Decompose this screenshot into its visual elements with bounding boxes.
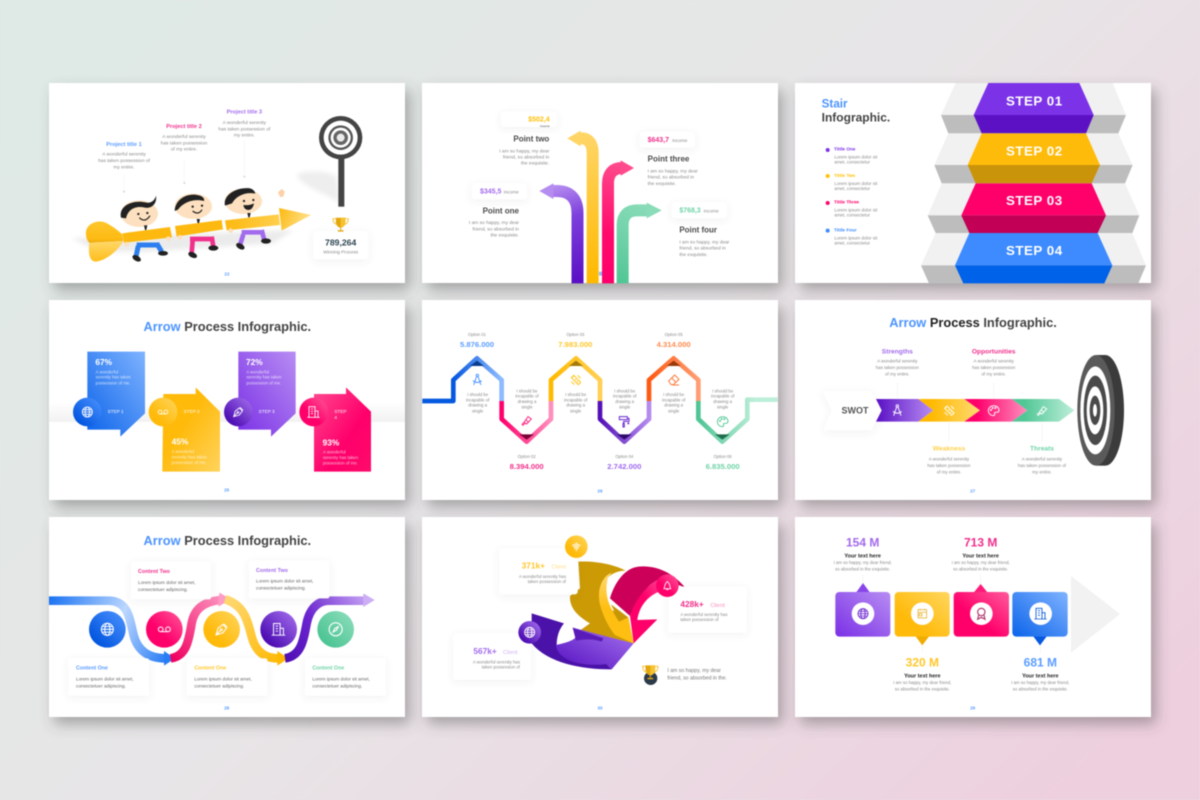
legend list: Tittle Two	[834, 173, 855, 178]
step 1: serenity has taken	[96, 375, 131, 380]
opportunities: Opportunities	[972, 348, 1016, 355]
step 1: A wonderful	[96, 369, 118, 374]
project title 1: A wonderful serenity	[102, 152, 146, 158]
step 3: STEP 3	[259, 409, 275, 414]
heading: Arrow Process Infographic.	[889, 315, 1057, 330]
winning stat card: 789,264	[325, 237, 356, 247]
project title 2	[161, 124, 208, 153]
step 2	[149, 387, 220, 472]
stat 713 M: so absorbed in the exquisite.	[953, 567, 1008, 572]
point four: the exquisite.	[679, 252, 708, 258]
step 2: 45%	[172, 437, 189, 447]
point three: $643,7	[648, 137, 669, 144]
step 03: STEP 03	[1006, 193, 1063, 208]
step 1: STEP 1	[108, 409, 124, 414]
arrow green	[623, 203, 662, 283]
option 04: I should be	[614, 388, 636, 393]
point two: income	[540, 124, 550, 128]
project title 1: has taken possession of	[98, 158, 151, 164]
legend list: Lorem ipsum dolor sit	[834, 235, 878, 240]
3D target	[1077, 355, 1124, 466]
card 567k: A wonderful serenity has	[473, 659, 520, 664]
pink curved arrow	[610, 566, 685, 643]
legend list: amet, consectetur	[834, 213, 870, 218]
panel: slide 24 branching arrows	[422, 83, 778, 283]
threats: A wonderful serenity	[1022, 457, 1063, 462]
step 3: 72%	[246, 357, 263, 367]
step 4: serenity has taken	[323, 455, 359, 460]
stat 320 M: so absorbed in the exquisite.	[895, 687, 950, 692]
content two purple: Lorem ipsum dolor sit amet,	[256, 579, 313, 584]
card 428k: A wonderful serenity has	[680, 612, 727, 617]
card 371k: A wonderful serenity has	[519, 574, 566, 579]
page number: 29	[970, 705, 976, 710]
point three: friend, so absorbed in	[648, 175, 694, 181]
option 01	[460, 332, 494, 413]
project title 2: A wonderful serenity	[162, 134, 206, 140]
legend list: Lorem ipsum dolor sit	[834, 181, 878, 186]
card 567k: Client	[503, 650, 518, 656]
trophy note: I am so happy, my dear	[667, 668, 721, 674]
block pink	[954, 584, 1009, 637]
option 04: 2.742.000	[607, 462, 641, 471]
page number	[599, 272, 602, 276]
stat 681 M: I am so happy, my dear friend,	[1011, 680, 1069, 685]
option 05: incapable of	[662, 397, 686, 402]
point three: income	[672, 138, 688, 143]
content one blue	[68, 658, 149, 696]
project title 3: has taken possession of	[218, 126, 271, 132]
option 04: single	[619, 404, 631, 409]
stat 681 M	[1011, 656, 1069, 692]
heading	[822, 98, 890, 125]
stat 681 M: 681 M	[1024, 656, 1057, 670]
option 05: 4.314.000	[657, 340, 691, 349]
panel: slide 27 SWOT arrow	[795, 300, 1151, 500]
page number: 27	[970, 488, 976, 493]
option 05: I should be	[663, 392, 685, 397]
point two: friend, so absorbed in	[503, 154, 550, 160]
point two: I am so happy, my dear	[499, 148, 550, 154]
point one: income	[504, 190, 519, 195]
option 01: I should be	[467, 392, 489, 397]
step 4: STEP	[334, 409, 347, 414]
stat 681 M: Your text here	[1022, 673, 1059, 679]
point one: the exquisite.	[491, 233, 519, 239]
step 2: possession of me.	[172, 460, 207, 465]
option 04	[607, 388, 641, 471]
weakness: of my entire.	[937, 469, 961, 474]
step 02: STEP 02	[1006, 143, 1063, 158]
weakness: Weakness	[933, 446, 966, 453]
page number: 30	[597, 705, 603, 710]
card 567k: taken possession of	[482, 664, 521, 669]
threats: my entire.	[1032, 469, 1052, 474]
legend list: amet, consectetur	[834, 186, 870, 191]
weakness	[927, 446, 971, 474]
page number: 28	[224, 705, 230, 710]
large grey arrow	[1071, 576, 1120, 653]
step 3: serenity has taken	[246, 375, 282, 380]
option 06	[706, 388, 740, 471]
option 03: I should be	[565, 392, 587, 397]
option 05	[657, 332, 691, 413]
stat 713 M: I am so happy, my dear friend,	[952, 560, 1010, 565]
threats	[1018, 446, 1067, 474]
legend list: Tittle Three	[834, 200, 859, 205]
character 1	[121, 196, 168, 263]
option 04: drawing a	[615, 399, 635, 404]
content two purple	[249, 561, 329, 598]
step 3: A wonderful	[246, 369, 269, 374]
arrow yellow	[567, 131, 593, 283]
step 2: serenity has taken	[172, 454, 207, 459]
step 02	[934, 133, 1133, 183]
content one blue: Lorem ipsum dolor sit amet,	[76, 677, 133, 682]
project title 1: my entire.	[113, 165, 135, 171]
step 2: A wonderful	[172, 449, 194, 454]
opportunities	[972, 348, 1016, 376]
card 428k: Client	[710, 603, 725, 609]
option 04: Option 04	[615, 454, 634, 459]
option 01: 5.876.000	[460, 340, 494, 349]
option 01: Option 01	[468, 332, 487, 337]
panel: slide 29 callout squares	[795, 517, 1151, 717]
option 01: incapable of	[466, 397, 490, 402]
card 428k: taken possession of	[680, 617, 719, 622]
option 03: single	[570, 408, 582, 413]
content two pink: Content Two	[138, 569, 171, 575]
chevron arrow	[876, 399, 1074, 422]
step 1: 67%	[95, 357, 113, 367]
content two purple: Content Two	[256, 568, 289, 574]
legend list: Tittle One	[834, 146, 856, 151]
option 03	[558, 332, 592, 413]
stat 713 M	[952, 536, 1010, 572]
option 05: single	[668, 408, 680, 413]
step 2: STEP 2	[184, 409, 200, 414]
dart arrow	[86, 208, 311, 262]
option 03: drawing a	[566, 403, 586, 408]
content one green: consectetuer adipiscing.	[312, 684, 362, 689]
option 02: 8.394.000	[510, 462, 544, 471]
circle globe	[89, 611, 126, 648]
page number: 26	[597, 489, 603, 494]
arrow purple	[539, 183, 577, 283]
strengths: has taken possession	[876, 365, 919, 370]
legend list: Lorem ipsum dolor sit	[834, 208, 878, 213]
step 01	[941, 83, 1126, 133]
option 06: incapable of	[711, 393, 735, 398]
character 2	[175, 194, 218, 259]
option 06: single	[717, 404, 729, 409]
project title 2: Project title 2	[166, 124, 202, 130]
option 03: incapable of	[564, 397, 588, 402]
panel: slide 26 zigzag options timeline	[422, 300, 778, 500]
wave arrows	[49, 593, 375, 666]
point four: friend, so absorbed in	[679, 246, 726, 252]
option 02: drawing a	[518, 399, 537, 404]
card 371k	[499, 535, 588, 594]
legend list: Lorem ipsum dolor sit	[834, 154, 878, 159]
zigzag line	[422, 358, 778, 442]
legend list	[826, 146, 878, 245]
card 567k	[453, 621, 541, 680]
stat 154 M: 154 M	[846, 536, 879, 550]
step 04	[921, 233, 1146, 283]
panel: stair infographic	[795, 83, 1151, 283]
point three	[640, 132, 698, 187]
content one yellow	[187, 658, 267, 696]
point two: $502,4	[528, 117, 550, 124]
card 428k	[656, 574, 747, 633]
content two pink: consectetuer adipiscing.	[138, 587, 188, 592]
arrow pink	[608, 160, 634, 283]
content one yellow: consectetuer adipiscing.	[194, 684, 244, 689]
strengths: Strengths	[882, 348, 913, 355]
legend list: Tittle Four	[834, 227, 857, 232]
panel: slide 30 three converging arrows	[422, 517, 778, 717]
peak markers	[470, 361, 730, 440]
option 04: incapable of	[613, 393, 637, 398]
option 06: Option 06	[714, 454, 732, 459]
step 4: 4	[334, 415, 337, 420]
block yellow	[895, 592, 950, 645]
content two pink	[131, 562, 211, 599]
content one green	[305, 658, 386, 696]
step 3: possession of me.	[246, 380, 281, 385]
strengths	[876, 348, 919, 376]
strengths: of my entire.	[885, 371, 910, 376]
option 01: single	[472, 408, 484, 413]
point one: friend, so absorbed in	[473, 226, 519, 232]
option 05: Option 05	[665, 332, 683, 337]
option 03: Option 03	[566, 332, 585, 337]
option 01: drawing a	[468, 403, 488, 408]
stat 713 M: Your text here	[962, 553, 999, 559]
step 4: possession of me.	[323, 461, 358, 466]
option 02	[510, 388, 544, 471]
project title 1	[98, 142, 151, 171]
weakness: has taken possession	[927, 463, 971, 468]
point two	[499, 112, 557, 167]
panel: slide 28 wave process	[49, 517, 405, 717]
opportunities: of my entire.	[981, 371, 1006, 376]
point two: the exquisite.	[521, 161, 549, 167]
trophy note: friend, so absorbed in the.	[667, 676, 727, 682]
content one yellow: Content One	[194, 666, 226, 672]
stat 320 M: Your text here	[904, 673, 941, 679]
yellow curved arrow	[570, 562, 634, 643]
circle compass	[317, 611, 354, 648]
card 567k: 567k+	[473, 646, 497, 656]
option 02: single	[521, 404, 533, 409]
stat 713 M: 713 M	[964, 536, 997, 550]
point three: Point three	[648, 155, 690, 164]
content one blue: Content One	[76, 666, 108, 672]
stat 320 M	[893, 656, 951, 692]
circle building	[260, 611, 297, 648]
threats: Threats	[1030, 446, 1054, 453]
point four	[672, 202, 730, 258]
heading: Stair	[822, 98, 848, 111]
option 05: drawing a	[664, 403, 684, 408]
card 371k: 371k+	[522, 560, 545, 570]
opportunities: has taken possession	[972, 365, 1016, 370]
project title 3: my entire.	[234, 132, 255, 138]
winning stat card: Winning Process	[323, 250, 359, 255]
heading: Arrow Process Infographic.	[144, 319, 311, 334]
threats: has taken possession of	[1018, 463, 1067, 468]
option 06: drawing a	[713, 399, 733, 404]
step 3	[224, 352, 296, 437]
content one green: Lorem ipsum dolor sit amet,	[312, 677, 370, 682]
strengths: A wonderful serenity	[877, 359, 918, 364]
stat 320 M: 320 M	[906, 656, 939, 670]
panel: slide 25 arrow process tabs	[49, 300, 405, 500]
project title 2: has taken possession	[161, 140, 208, 146]
character 3	[225, 188, 285, 251]
content one blue: consectetuer adipiscing.	[76, 684, 126, 689]
page number: 25	[224, 488, 230, 493]
weakness: A wonderful serenity	[929, 457, 970, 462]
option 02: Option 02	[518, 454, 536, 459]
point four: $768,3	[679, 208, 701, 215]
step 01: STEP 01	[1006, 94, 1063, 109]
point one: I am so happy, my dear	[469, 220, 519, 226]
project title 3: Project title 3	[227, 109, 262, 115]
step 03	[928, 183, 1139, 233]
card 428k: 428k+	[680, 599, 704, 609]
step 1: possession of me.	[96, 380, 131, 385]
card 371k: Client	[552, 565, 566, 571]
heading: Infographic.	[822, 111, 890, 125]
stat 154 M: so absorbed in the exquisite.	[835, 567, 890, 572]
stat 320 M: I am so happy, my dear friend,	[893, 680, 951, 685]
project title 2: of my entire.	[171, 147, 197, 153]
block purple	[835, 583, 890, 637]
point two: Point two	[513, 134, 549, 143]
option 06: I should be	[712, 388, 734, 393]
point one: Point one	[483, 206, 520, 215]
point one	[469, 183, 527, 239]
content one green: Content One	[312, 666, 344, 672]
content two purple: consectetuer adipiscing.	[256, 586, 306, 591]
point one: $345,5	[480, 189, 501, 196]
step 4	[299, 387, 371, 472]
content two pink: Lorem ipsum dolor sit amet,	[138, 580, 195, 585]
page number: 22	[224, 272, 230, 277]
content one yellow: Lorem ipsum dolor sit amet,	[194, 677, 252, 682]
purple curved arrow	[532, 613, 634, 669]
stat 154 M: I am so happy, my dear friend,	[834, 560, 892, 565]
circle voicemail	[146, 611, 183, 648]
SWOT chevron: SWOT	[842, 406, 869, 416]
card 371k: taken possession of	[528, 579, 567, 584]
point three: I am so happy, my dear	[648, 168, 698, 174]
SWOT chevron	[822, 391, 882, 430]
option 06: 6.835.000	[706, 462, 740, 471]
stat 154 M: Your text here	[844, 553, 881, 559]
project title 3: A wonderful serenity	[223, 120, 267, 126]
point four: I am so happy, my dear	[679, 239, 730, 245]
trophy note	[643, 665, 727, 685]
block blue	[1012, 592, 1068, 645]
step 04: STEP 04	[1006, 243, 1063, 258]
point four: income	[704, 209, 719, 214]
project title 1: Project title 1	[106, 142, 142, 148]
point three: the exquisite.	[648, 181, 676, 187]
option 02: incapable of	[515, 393, 539, 398]
project title 3	[218, 109, 271, 138]
option 02: I should be	[516, 388, 538, 393]
legend list: amet, consectetur	[834, 240, 870, 245]
circle pen	[203, 611, 240, 648]
stat 681 M: so absorbed in the exquisite.	[1013, 687, 1068, 692]
option 03: 7.983.000	[558, 340, 592, 349]
step 4: A wonderful	[323, 450, 346, 455]
panel: slide 22 team pulling dart to target	[49, 83, 405, 283]
stat 154 M	[834, 536, 892, 572]
winning stat card	[313, 218, 368, 259]
opportunities: A wonderful serenity	[973, 359, 1015, 364]
step 4: 93%	[323, 437, 340, 447]
heading: Arrow Process Infographic.	[144, 533, 311, 548]
point four: Point four	[679, 226, 717, 235]
floor shadow	[72, 230, 293, 252]
legend list: amet, consectetur	[834, 159, 870, 164]
step 1	[73, 352, 145, 437]
target on pole	[297, 116, 362, 207]
